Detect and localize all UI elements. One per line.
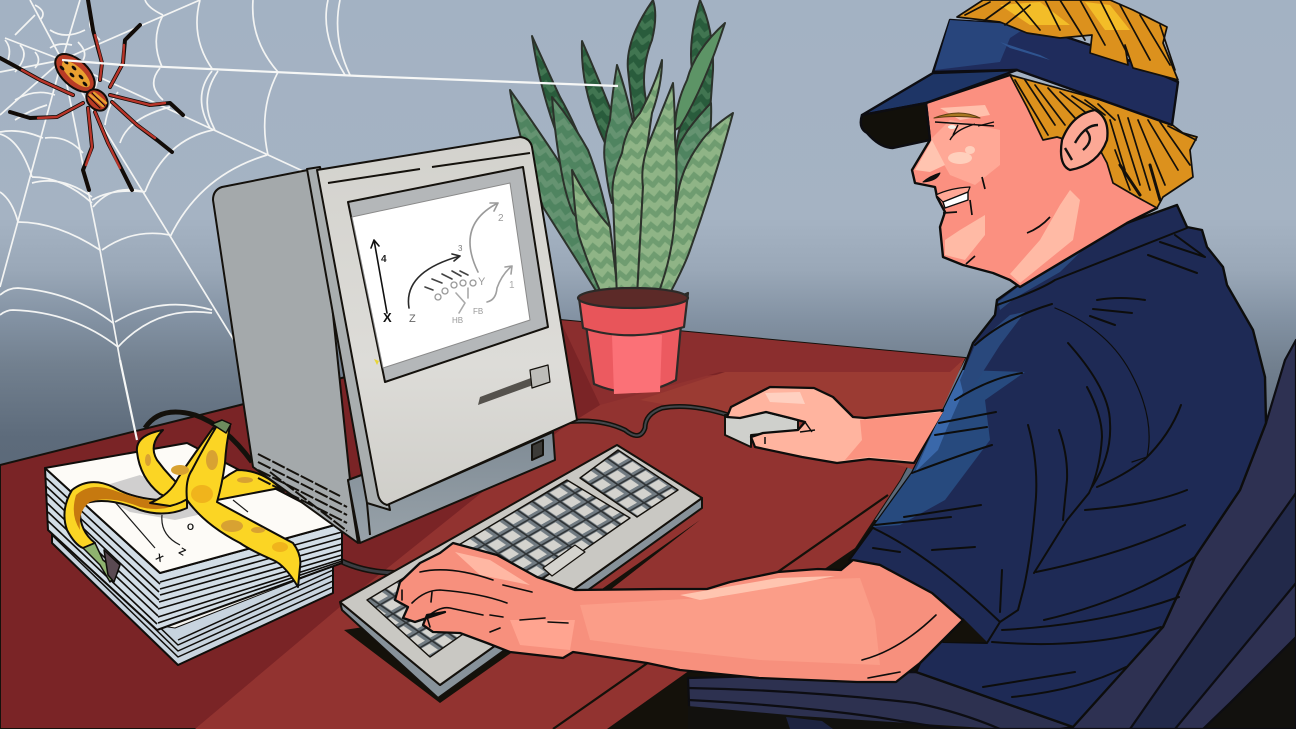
keyboard — [340, 445, 702, 703]
plant leaves — [510, 0, 733, 297]
base — [348, 432, 555, 543]
dark back leaves — [675, 0, 713, 150]
stem stump — [83, 543, 120, 582]
right light leaf — [658, 113, 733, 297]
eyebrow — [934, 113, 980, 118]
vents — [258, 454, 347, 531]
spider — [0, 0, 183, 190]
top left peel — [137, 430, 190, 498]
play labels: Y — [478, 276, 486, 288]
plant pot — [578, 288, 688, 394]
front strip — [307, 167, 390, 510]
front small light leaf — [572, 170, 618, 297]
top sheet — [45, 443, 342, 573]
mouse cord — [565, 407, 728, 436]
sleeve highlight — [873, 370, 1025, 527]
rear port — [532, 440, 543, 460]
mid leaves — [510, 90, 615, 297]
floppy slot — [478, 372, 547, 405]
play on top sheet — [154, 522, 194, 565]
hair top — [957, 0, 1178, 80]
near arm and hand — [395, 543, 963, 686]
shoulder highlight — [960, 312, 1025, 400]
play labels: 1 — [509, 280, 515, 291]
play labels: Z — [409, 313, 416, 325]
collar highlight — [998, 240, 1093, 310]
play labels: HB — [452, 316, 463, 325]
eye — [935, 122, 994, 140]
play labels: 3 — [458, 244, 463, 253]
centre light leaf — [637, 83, 676, 297]
brim underside — [861, 103, 930, 148]
chair back — [1060, 340, 1296, 729]
paper stack with banana peel — [45, 420, 342, 665]
neck and face — [912, 75, 1157, 287]
middle strip — [150, 428, 226, 506]
front case — [317, 137, 577, 505]
play on top sheet: X — [154, 552, 165, 565]
screen bezel — [348, 167, 548, 382]
hair side — [1010, 75, 1197, 208]
dark gap between front leaves — [634, 170, 645, 245]
desk surface — [0, 320, 965, 729]
lower stack — [52, 517, 333, 665]
play labels: 2 — [498, 213, 504, 224]
chair seat — [688, 672, 1073, 729]
gap below sleeve — [943, 618, 987, 642]
visor brim — [862, 70, 1017, 115]
play labels: X — [383, 310, 392, 325]
web thread to leaf — [62, 60, 618, 86]
upper stack — [45, 468, 342, 630]
nostril — [923, 173, 940, 182]
floor shadow under desk — [590, 520, 920, 729]
visor — [861, 20, 1178, 148]
play on top sheet: Z — [177, 546, 187, 559]
number pad — [580, 450, 678, 517]
play labels: FB — [473, 307, 483, 316]
far arm and hand on mouse — [727, 387, 943, 463]
ear detail — [1065, 125, 1098, 160]
front left light leaf — [612, 60, 662, 297]
football play — [371, 203, 512, 313]
shirt torso — [849, 205, 1266, 727]
spider web — [0, 0, 350, 360]
space bar — [543, 545, 585, 576]
wrinkles — [873, 228, 1205, 697]
play labels — [381, 213, 515, 325]
nose highlight — [915, 140, 945, 172]
left peel — [64, 482, 187, 548]
thin tall leaf — [675, 23, 725, 130]
indicator mark — [374, 359, 379, 365]
computer monitor — [213, 137, 577, 543]
play on top sheet: O — [187, 522, 194, 532]
long right peel — [187, 424, 300, 587]
teeth — [943, 192, 968, 208]
main keys — [367, 480, 630, 657]
side panel — [213, 168, 358, 543]
face lines — [943, 177, 1050, 264]
ear — [1061, 110, 1108, 170]
web strand to banana — [120, 360, 137, 440]
monitor cable — [145, 412, 395, 573]
visor band — [933, 20, 1178, 125]
neck highlight — [1010, 190, 1080, 283]
computer mouse — [725, 412, 798, 447]
back right peel — [210, 470, 280, 500]
play labels: 4 — [381, 254, 387, 265]
lips — [936, 187, 970, 202]
cheek highlight — [930, 120, 1000, 185]
